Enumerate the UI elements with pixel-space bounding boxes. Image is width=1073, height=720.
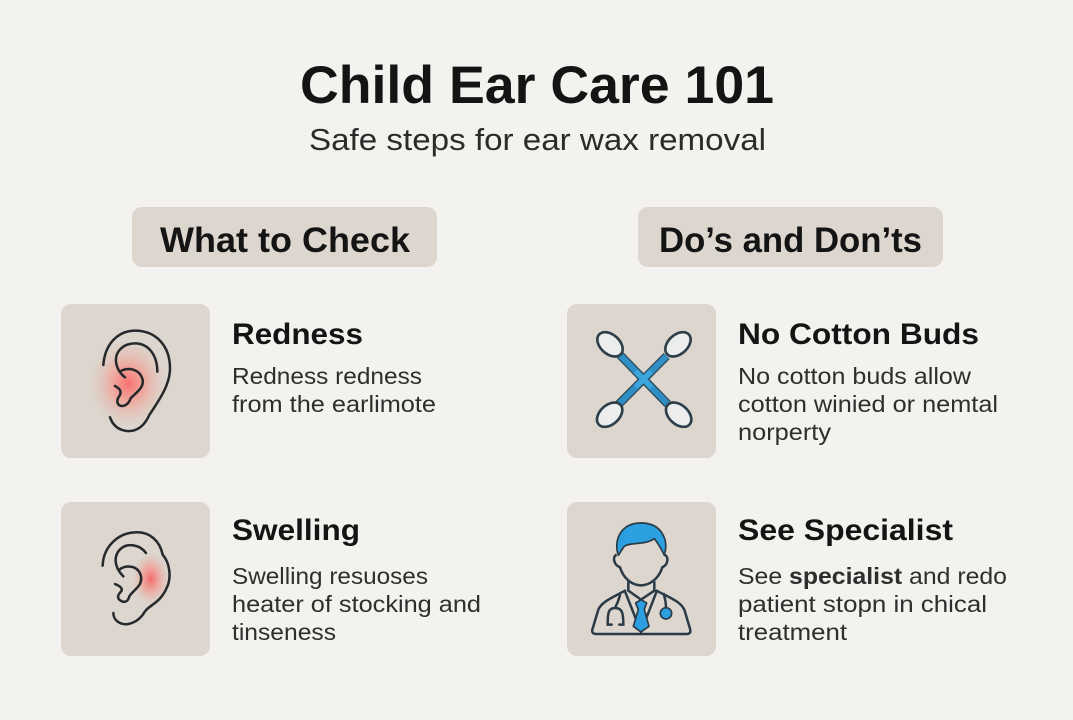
text: redness description xyxy=(232,363,436,417)
panel: what to check xyxy=(61,207,481,656)
heading: do's and don'ts: Do’s and Don’ts xyxy=(659,221,922,260)
icon: red ear xyxy=(61,304,210,458)
icon: swollen ear xyxy=(61,502,210,656)
subtitle: Safe steps for ear wax removal xyxy=(309,122,766,157)
text: no cotton buds description: cotton winied or nemtal xyxy=(738,391,998,417)
heading: no cotton buds: No Cotton Buds xyxy=(738,318,979,351)
text: see specialist description: treatment xyxy=(738,619,848,645)
text: no cotton buds description: No cotton buds allow xyxy=(738,363,972,389)
text: swelling description: tinseness xyxy=(232,619,336,645)
item: swelling xyxy=(61,502,481,656)
text: no cotton buds description: norperty xyxy=(738,419,831,445)
heading: redness: Redness xyxy=(232,318,363,351)
heading: do's and don'ts xyxy=(638,207,943,267)
title: Child Ear Care 101 xyxy=(300,56,774,115)
heading: what to check: What to Check xyxy=(160,221,411,260)
text: see specialist description xyxy=(738,563,1007,645)
heading: what to check xyxy=(132,207,437,267)
item: see specialist xyxy=(567,502,1007,656)
text: redness description: from the earlimote xyxy=(232,391,436,417)
icon: crossed cotton buds xyxy=(567,304,716,458)
text: swelling description xyxy=(232,563,481,645)
text: see specialist description: See specialist and redo xyxy=(738,563,1007,589)
text: see specialist description: patient stopn in chical xyxy=(738,591,987,617)
item: redness xyxy=(61,304,436,458)
icon: doctor xyxy=(567,502,716,656)
text: swelling description: heater of stocking and xyxy=(232,591,481,617)
panel: do's and don'ts xyxy=(567,207,1007,656)
text: swelling description: Swelling resuoses xyxy=(232,563,428,589)
text: redness description: Redness redness xyxy=(232,363,422,389)
heading: swelling: Swelling xyxy=(232,514,360,547)
item: no cotton buds xyxy=(567,304,998,458)
heading: see specialist: See Specialist xyxy=(738,514,953,547)
text: no cotton buds description xyxy=(738,363,998,445)
